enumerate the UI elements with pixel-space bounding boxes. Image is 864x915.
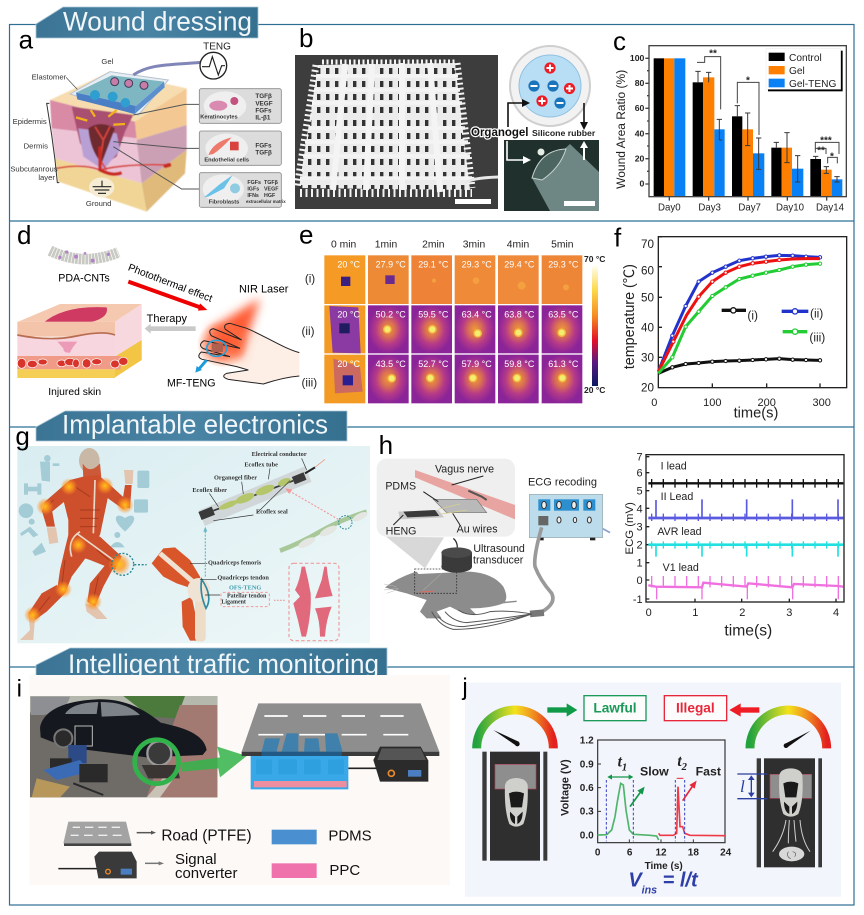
temperature readings: 50.2 °C: [376, 310, 406, 320]
row labels: [302, 272, 317, 390]
label i: i: [17, 676, 22, 703]
ECG recorder: [528, 477, 610, 540]
TENG symbol: TENG: [203, 42, 231, 53]
curve legend: (iii): [809, 330, 825, 344]
voltage chart: 2: [681, 762, 688, 773]
callout: fibroblasts: HGF: [264, 193, 276, 199]
voltage chart: 18: [688, 847, 699, 858]
knee labels: Patellar tendon: [227, 593, 267, 599]
temperature readings: [337, 259, 579, 369]
skin block: [50, 72, 187, 212]
runner figure: [20, 448, 133, 640]
axis labels: 40: [641, 321, 655, 334]
ECG tick labels: -1: [633, 594, 643, 606]
callout lines: [113, 104, 199, 189]
car photo: [30, 696, 217, 797]
panel i: smart road: [17, 675, 450, 885]
temperature readings: 29.4 °C: [504, 259, 535, 269]
curve i: [658, 357, 822, 373]
label b: b: [299, 23, 313, 53]
column headings: 5min: [551, 239, 574, 250]
temperature readings: 63.4 °C: [462, 310, 492, 320]
panel f: temperature curves: [614, 223, 847, 421]
schematic: organogel in silicone rubber: [508, 46, 590, 130]
TENG symbol: [200, 42, 231, 79]
knee anatomy: [152, 547, 210, 642]
ECG tick labels: 7: [637, 452, 643, 464]
axis labels: 100: [703, 397, 721, 409]
fiber device: Electrical conductor: [252, 451, 307, 458]
heading: Wound dressing: Wound dressing: [63, 6, 252, 36]
voltage chart: 24: [720, 847, 732, 858]
row i: [324, 255, 582, 304]
ECG tick labels: 5: [637, 486, 643, 498]
yellow arrows: [76, 110, 125, 125]
fiber device: Ecoflex tube: [244, 462, 278, 469]
column headings: 0 min: [331, 239, 357, 250]
legend: Control: [789, 53, 822, 64]
lawful tag: [547, 696, 646, 721]
skin labels: Elastomer: [32, 72, 67, 81]
legend: PPC: [272, 862, 360, 879]
voltage chart: 0.3: [580, 807, 594, 818]
PDA-CNTs icon: [50, 250, 118, 285]
heading: Implantable electronics: Implantable electronics: [62, 410, 328, 440]
error bars: [695, 71, 840, 182]
ECG chart: [624, 452, 844, 639]
panel h: vagus nerve stimulation: [377, 430, 610, 629]
column headings: 1min: [375, 239, 397, 250]
legend: road: Road (PTFE): [161, 828, 252, 845]
label g: g: [15, 421, 30, 451]
panel j: speed detection: [461, 674, 841, 897]
axis labels: Day10: [776, 203, 804, 214]
ECG tick labels: time(s): [724, 622, 772, 639]
row iii: [324, 355, 582, 403]
knee highlight: [112, 553, 147, 575]
ECG tick labels: 1: [637, 558, 643, 570]
label j: j: [461, 674, 468, 701]
callout: fibroblasts: Fibroblasts: [209, 199, 239, 205]
callout: keratinocytes: FGFs: [255, 107, 272, 114]
ECG tick labels: 3: [786, 607, 792, 619]
injured skin block: [17, 304, 142, 398]
skin labels: Epidermis: [13, 117, 47, 126]
axis labels: 20: [635, 153, 645, 163]
gel patch: [70, 62, 200, 115]
voltage chart: 0: [595, 847, 601, 858]
voltage chart: [559, 735, 732, 872]
velocity formula: V: [628, 870, 642, 892]
callout: fibroblasts: extracellular matrix: [246, 199, 286, 204]
voltage chart: 0.9: [580, 759, 594, 770]
illegal tag: [664, 696, 759, 721]
ECG tick labels: 4: [637, 503, 643, 515]
colour bar: 70 °C: [584, 254, 605, 264]
wires and cable: [432, 527, 553, 629]
temperature readings: 59.8 °C: [504, 359, 535, 369]
legend: road: [63, 822, 252, 846]
ECG tick labels: 0: [646, 607, 652, 619]
callout: keratinocytes: [199, 89, 281, 123]
legend: signal converter: converter: [175, 865, 237, 882]
knee labels: Ligament: [221, 599, 246, 605]
panel c: wound area bar chart: [613, 26, 846, 214]
callout: keratinocytes: IL-β1: [255, 114, 271, 121]
curve ii: [658, 254, 822, 372]
knee labels: Quadriceps femoris: [208, 559, 262, 566]
voltage chart: t: [618, 754, 622, 771]
temperature readings: 20 °C: [337, 310, 360, 320]
skin labels: Gel: [101, 57, 114, 66]
callout: endothelial cells: FGFs: [255, 142, 272, 149]
axis labels: Day3: [698, 203, 721, 214]
panel e: thermal images: [299, 219, 582, 403]
temperature readings: 29.3 °C: [548, 259, 579, 269]
label h: h: [379, 430, 393, 460]
fiber device: [192, 451, 325, 521]
temperature readings: 29.3 °C: [462, 259, 492, 269]
ECG tick labels: 3: [637, 522, 643, 534]
skin labels: [10, 57, 114, 208]
skin labels: Subcutanrous: [10, 164, 58, 173]
row labels: (ii): [302, 325, 315, 338]
therapy arrow: [145, 313, 196, 334]
PDA-CNTs icon: PDA-CNTs: [58, 273, 110, 285]
row labels: (iii): [302, 377, 317, 390]
lawful tag: Lawful: [593, 701, 637, 716]
left lane with car: [482, 752, 547, 861]
knee labels: [190, 527, 269, 607]
photo: woven mesh: [295, 55, 498, 209]
panel c: wound area bar chart: *: [830, 151, 834, 162]
axis labels: 80: [635, 78, 645, 88]
trace: V1 lead: V1 lead: [663, 562, 699, 574]
inset: PDMS: [385, 481, 416, 493]
green marker arrow: [135, 740, 247, 784]
callout: endothelial cells: TGFβ: [255, 150, 272, 157]
colour bar: 20 °C: [584, 385, 605, 395]
twisted fiber: [280, 488, 369, 551]
callout: keratinocytes: VEGF: [255, 100, 273, 107]
voltage chart: Fast: [696, 765, 721, 779]
curve legend: [722, 307, 825, 344]
hand with NIR laser: NIR Laser: [239, 284, 289, 296]
right gauge: [750, 710, 827, 748]
photothermal arrow: Photothermal effect: [126, 263, 214, 305]
axis labels: 0: [640, 179, 645, 189]
axes: [658, 237, 847, 388]
trace: V1 lead: [648, 562, 843, 599]
voltage chart: Slow: [640, 765, 669, 779]
axis labels: 300: [813, 397, 831, 409]
therapy arrow: Therapy: [147, 313, 187, 325]
curve iii: [658, 262, 822, 373]
background: [29, 675, 450, 885]
column headings: 2min: [422, 239, 445, 250]
label: Silicone rubber: Silicone rubber: [532, 128, 596, 138]
inset: Au wires: [457, 524, 498, 536]
temperature readings: 29.1 °C: [418, 259, 449, 269]
signal converter: [348, 747, 428, 782]
label d: d: [17, 220, 31, 250]
skin labels: layer: [38, 173, 55, 182]
hand with NIR laser: MF-TENG: [167, 378, 216, 390]
legend: PDMS: PDMS: [328, 828, 372, 845]
panel a: wound dressing schematic: [10, 24, 286, 212]
injured skin block: Injured skin: [48, 387, 101, 398]
trace: I lead: I lead: [661, 460, 687, 472]
axis labels: [622, 238, 831, 421]
velocity formula: = l/t: [657, 870, 699, 892]
skin labels: Ground: [86, 199, 111, 208]
callout: fibroblasts: FGFs: [247, 180, 261, 186]
row labels: (i): [305, 272, 315, 285]
bars: [654, 58, 842, 197]
column headings: 3min: [463, 239, 485, 250]
trace: AVR lead: AVR lead: [657, 526, 702, 538]
road layer: [242, 703, 439, 789]
legend: PPC: PPC: [329, 862, 360, 879]
label c: c: [613, 26, 626, 56]
temperature readings: 52.7 °C: [418, 359, 449, 369]
axis labels: Day7: [738, 203, 761, 214]
curve red: [658, 258, 820, 372]
mouse with transducer: [384, 537, 525, 618]
axis labels: 60: [635, 103, 645, 113]
temperature readings: 61.3 °C: [548, 359, 579, 369]
axis labels: 30: [641, 352, 655, 365]
temperature readings: 43.5 °C: [376, 359, 406, 369]
trace: II lead: [648, 491, 843, 518]
illegal tag: Illegal: [676, 701, 715, 716]
temperature readings: 20 °C: [337, 359, 360, 369]
callout: endothelial cells: [199, 131, 281, 165]
heading: Intelligent traffic monitoring: Intelligent traffic monitoring: [68, 649, 379, 679]
legend: [766, 49, 843, 91]
callout: fibroblasts: [199, 173, 286, 207]
column headings: [331, 239, 574, 250]
axis labels: 50: [641, 291, 655, 304]
panel c: wound area bar chart: **: [709, 49, 717, 60]
mouse with transducer: Ultrasound: [473, 543, 525, 555]
temperature readings: 63.5 °C: [548, 310, 579, 320]
column headings: 4min: [507, 239, 529, 250]
voltage chart: Voltage (V): [559, 759, 571, 816]
axis labels: 20: [641, 382, 655, 395]
length marker: l: [740, 777, 745, 796]
trace: AVR lead: [648, 526, 843, 557]
legend: Gel: [789, 66, 805, 77]
callout: endothelial cells: Endothelial cells: [204, 157, 249, 163]
voltage chart: 1: [622, 763, 627, 774]
axis labels: 100: [630, 53, 645, 63]
health icons: [19, 455, 149, 556]
length marker: [737, 774, 767, 799]
legend: PDMS: [272, 828, 372, 845]
callout: keratinocytes: Keratinocytes: [200, 115, 238, 121]
legend: signal converter: [58, 851, 237, 882]
ECG tick labels: 6: [637, 468, 643, 480]
voltage chart: 12: [655, 847, 667, 858]
velocity formula: ins: [642, 884, 657, 896]
axis labels: time(s): [734, 405, 778, 421]
panel c: wound area bar chart: ***: [820, 135, 832, 146]
axis labels: 200: [758, 397, 776, 409]
ECG tick labels: 4: [833, 607, 839, 619]
ECG tick labels: 2: [637, 540, 643, 552]
callout: fibroblasts: TGFβ: [264, 180, 279, 186]
inset: Vagus nerve: [435, 464, 494, 476]
legend: signal converter: Signal: [175, 851, 217, 868]
callout: fibroblasts: IFNs: [247, 193, 259, 199]
ECG tick labels: ECG (mV): [624, 502, 636, 554]
panel g: implantable textile: [15, 421, 370, 643]
temperature readings: 57.9 °C: [462, 359, 492, 369]
ECG tick labels: 1: [692, 607, 698, 619]
ECG recorder: ECG recoding: [528, 477, 597, 489]
left gauge: [477, 710, 553, 748]
ECG tick labels: [624, 452, 839, 639]
axis labels: Day0: [658, 203, 681, 214]
callout: fibroblasts: IGFs: [247, 187, 259, 193]
voltage chart: 0.0: [580, 830, 594, 841]
fiber device: Ecoflex fiber: [192, 487, 227, 494]
panel b: textile photo and schematic: [295, 23, 599, 211]
label a: a: [19, 24, 34, 54]
panel d: photothermal therapy: [17, 220, 299, 398]
voltage chart: 0.6: [580, 783, 594, 794]
voltage chart: 6: [627, 847, 633, 858]
temperature readings: 59.5 °C: [418, 310, 449, 320]
voltage chart: t: [677, 753, 682, 770]
ECG tick labels: 2: [739, 607, 745, 619]
axis labels: Wound Area Ratio (%): [614, 70, 628, 189]
fiber device: Ecoflex seal: [256, 509, 288, 516]
panel c: wound area bar chart: *: [746, 75, 750, 86]
curve legend: (ii): [810, 307, 823, 321]
right lane with car: [757, 758, 822, 867]
axis labels: temperature (℃): [622, 264, 638, 369]
axis labels: 0: [651, 397, 657, 409]
photo: fiber end: [504, 140, 599, 211]
row ii: [324, 305, 582, 353]
curve legend: (i): [747, 308, 758, 322]
axis labels: 70: [641, 238, 655, 251]
ECG tick labels: 0: [637, 575, 643, 587]
axis labels: Day14: [816, 203, 845, 214]
panel c: wound area bar chart: **: [817, 145, 825, 156]
temperature readings: 63.8 °C: [504, 310, 535, 320]
axes: [646, 455, 844, 602]
skin labels: Dermis: [24, 142, 48, 151]
axis labels: 60: [641, 264, 655, 277]
background: [17, 446, 370, 643]
axis labels: [614, 53, 845, 214]
knee labels: Quadriceps tendon: [217, 574, 269, 581]
knee labels: OFS-TENG: [229, 584, 261, 591]
colour bar: [584, 254, 605, 395]
inset: [377, 459, 515, 538]
joint glows: [24, 477, 134, 624]
inset: HENG: [386, 526, 416, 538]
label e: e: [299, 219, 313, 249]
axis labels: 40: [635, 128, 645, 138]
temperature readings: 20 °C: [337, 259, 360, 269]
callout: keratinocytes: TGFβ: [255, 93, 272, 100]
background: [465, 683, 841, 897]
trace: II lead: II Lead: [661, 491, 693, 503]
hand with NIR laser: [167, 284, 299, 390]
significance brackets: [697, 57, 839, 163]
temperature readings: 27.9 °C: [376, 259, 406, 269]
ground symbol: [89, 177, 114, 197]
axes: [645, 46, 846, 201]
mouse with transducer: transducer: [473, 555, 524, 567]
voltage chart: Time (s): [645, 861, 683, 872]
legend: Gel-TENG: [789, 79, 836, 90]
label f: f: [614, 223, 622, 253]
fiber device: Organogel fiber: [214, 474, 257, 481]
label: Organogel: Organogel: [471, 127, 529, 139]
callout: fibroblasts: VEGF: [264, 187, 279, 193]
voltage chart: 1.2: [580, 735, 594, 746]
tendon inset: [274, 563, 339, 641]
